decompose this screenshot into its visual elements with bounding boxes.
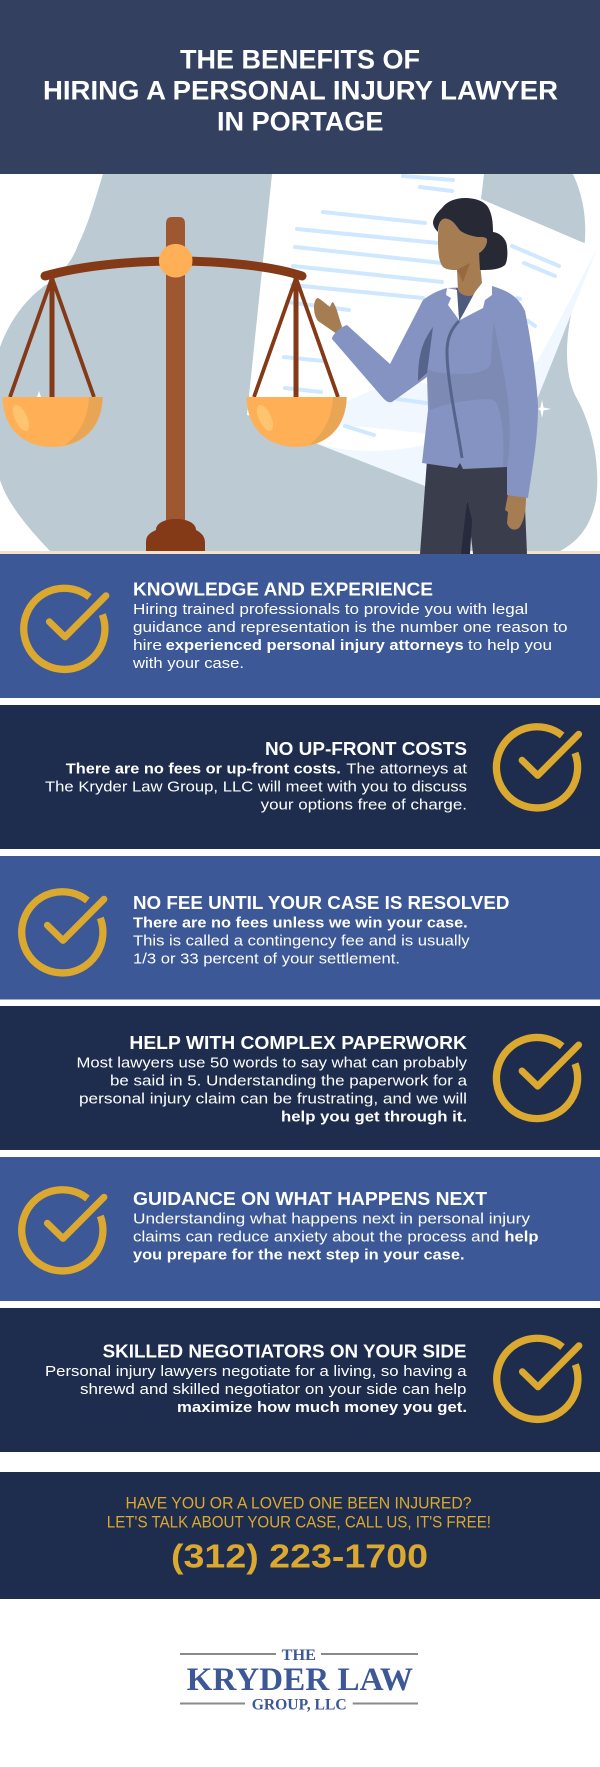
documents bbox=[247, 174, 597, 486]
raised hand bbox=[314, 298, 342, 334]
illustration: scales of justice and lawyer bbox=[0, 174, 600, 554]
floor line bbox=[0, 551, 420, 554]
title: HIRING A PERSONAL INJURY LAWYER bbox=[43, 76, 558, 106]
title: IN PORTAGE bbox=[217, 107, 384, 137]
jacket placket bbox=[447, 321, 462, 458]
trousers bbox=[420, 460, 527, 554]
body text: to help you bbox=[468, 637, 552, 654]
neck and face bbox=[438, 219, 487, 296]
body text: hire bbox=[133, 637, 162, 654]
body text: you prepare for the next step in your case. bbox=[133, 1246, 465, 1263]
body text: claims can reduce anxiety about the process and bbox=[133, 1228, 499, 1245]
body text: guidance and representation is the number one reason to bbox=[133, 619, 568, 636]
heading: GUIDANCE ON WHAT HAPPENS NEXT bbox=[133, 1188, 488, 1209]
call to action text bbox=[107, 1494, 491, 1531]
body text bbox=[45, 1363, 467, 1416]
body text: 1/3 or 33 percent of your settlement. bbox=[133, 950, 400, 967]
body text: experienced personal injury attorneys bbox=[166, 637, 464, 654]
call to action text: LET'S TALK ABOUT YOUR CASE, CALL US, IT'S FREE! bbox=[107, 1512, 491, 1531]
icon: check mark bbox=[22, 1190, 104, 1271]
body text: This is called a contingency fee and is usually bbox=[133, 932, 470, 949]
body text: personal injury claim can be frustrating, and we will bbox=[79, 1091, 467, 1108]
panel: guidance on what happens next bbox=[0, 1157, 600, 1301]
body text bbox=[133, 914, 470, 967]
body text bbox=[132, 601, 568, 672]
heading: SKILLED NEGOTIATORS ON YOUR SIDE bbox=[103, 1341, 466, 1362]
panel: skilled negotiators on your side bbox=[0, 1308, 600, 1452]
logo: The Kryder Law Group, LLC bbox=[180, 1647, 418, 1713]
icon: check mark bbox=[496, 727, 579, 808]
collar bbox=[446, 283, 492, 320]
body text: The Kryder Law Group, LLC will meet with you to discuss bbox=[45, 778, 467, 795]
call to action panel bbox=[0, 1472, 600, 1599]
body text: shrewd and skilled negotiator on your side can help bbox=[80, 1381, 466, 1398]
jacket shading bbox=[427, 322, 510, 467]
shirt bbox=[456, 288, 480, 320]
background blob bbox=[0, 174, 597, 551]
icon: check mark bbox=[24, 588, 106, 669]
body text: your options free of charge. bbox=[261, 797, 467, 814]
logo: The Kryder Law Group, LLC: GROUP, LLC bbox=[252, 1696, 347, 1713]
body text bbox=[133, 1210, 538, 1263]
icon: check mark bbox=[22, 892, 104, 973]
body text: Most lawyers use 50 words to say what can probably bbox=[76, 1055, 468, 1072]
body text: There are no fees or up-front costs. bbox=[66, 760, 341, 777]
scale base bbox=[146, 519, 205, 551]
heading: HELP WITH COMPLEX PAPERWORK bbox=[129, 1032, 468, 1053]
logo: The Kryder Law Group, LLC: KRYDER LAW bbox=[187, 1662, 413, 1698]
icon: check mark bbox=[497, 1338, 579, 1419]
heading: NO FEE UNTIL YOUR CASE IS RESOLVED bbox=[133, 892, 509, 913]
title: THE BENEFITS OF bbox=[180, 45, 420, 75]
scale beam bbox=[45, 261, 302, 276]
header banner bbox=[0, 0, 600, 174]
body text: Hiring trained professionals to provide you with legal bbox=[133, 601, 528, 618]
body text bbox=[45, 760, 468, 814]
heading: KNOWLEDGE AND EXPERIENCE bbox=[133, 579, 433, 600]
body text: with your case. bbox=[132, 655, 244, 672]
scale post bbox=[166, 217, 185, 525]
panel: no fee until your case is resolved bbox=[0, 856, 600, 1000]
body text: help bbox=[504, 1228, 538, 1245]
lawyer figure bbox=[314, 198, 538, 554]
right pan bbox=[246, 278, 347, 447]
lower hand bbox=[505, 494, 526, 530]
panel: knowledge and experience bbox=[0, 554, 600, 698]
jacket bbox=[332, 286, 538, 498]
body text: Personal injury lawyers negotiate for a living, so having a bbox=[45, 1363, 467, 1380]
left pan bbox=[2, 278, 103, 447]
call to action text: HAVE YOU OR A LOVED ONE BEEN INJURED? bbox=[126, 1494, 472, 1513]
body text: be said in 5. Understanding the paperwork for a bbox=[110, 1073, 468, 1090]
hair bbox=[433, 198, 507, 270]
icon: check mark bbox=[496, 1037, 579, 1119]
phone number: (312) 223-1700 bbox=[171, 1538, 428, 1575]
panel: no up-front costs bbox=[0, 705, 600, 849]
sparkles bbox=[37, 391, 551, 418]
logo: The Kryder Law Group, LLC: THE bbox=[282, 1647, 316, 1664]
body text bbox=[76, 1055, 468, 1126]
body text: maximize how much money you get. bbox=[177, 1399, 467, 1416]
body text: The attorneys at bbox=[346, 760, 468, 777]
heading: NO UP-FRONT COSTS bbox=[265, 738, 467, 759]
scales of justice bbox=[2, 217, 347, 551]
body text: Understanding what happens next in personal injury bbox=[133, 1210, 531, 1227]
panel: help with complex paperwork bbox=[0, 1006, 600, 1150]
body text: There are no fees unless we win your case. bbox=[133, 914, 468, 931]
scale pivot bbox=[159, 244, 192, 278]
body text: help you get through it. bbox=[281, 1109, 467, 1126]
title bbox=[43, 45, 558, 137]
